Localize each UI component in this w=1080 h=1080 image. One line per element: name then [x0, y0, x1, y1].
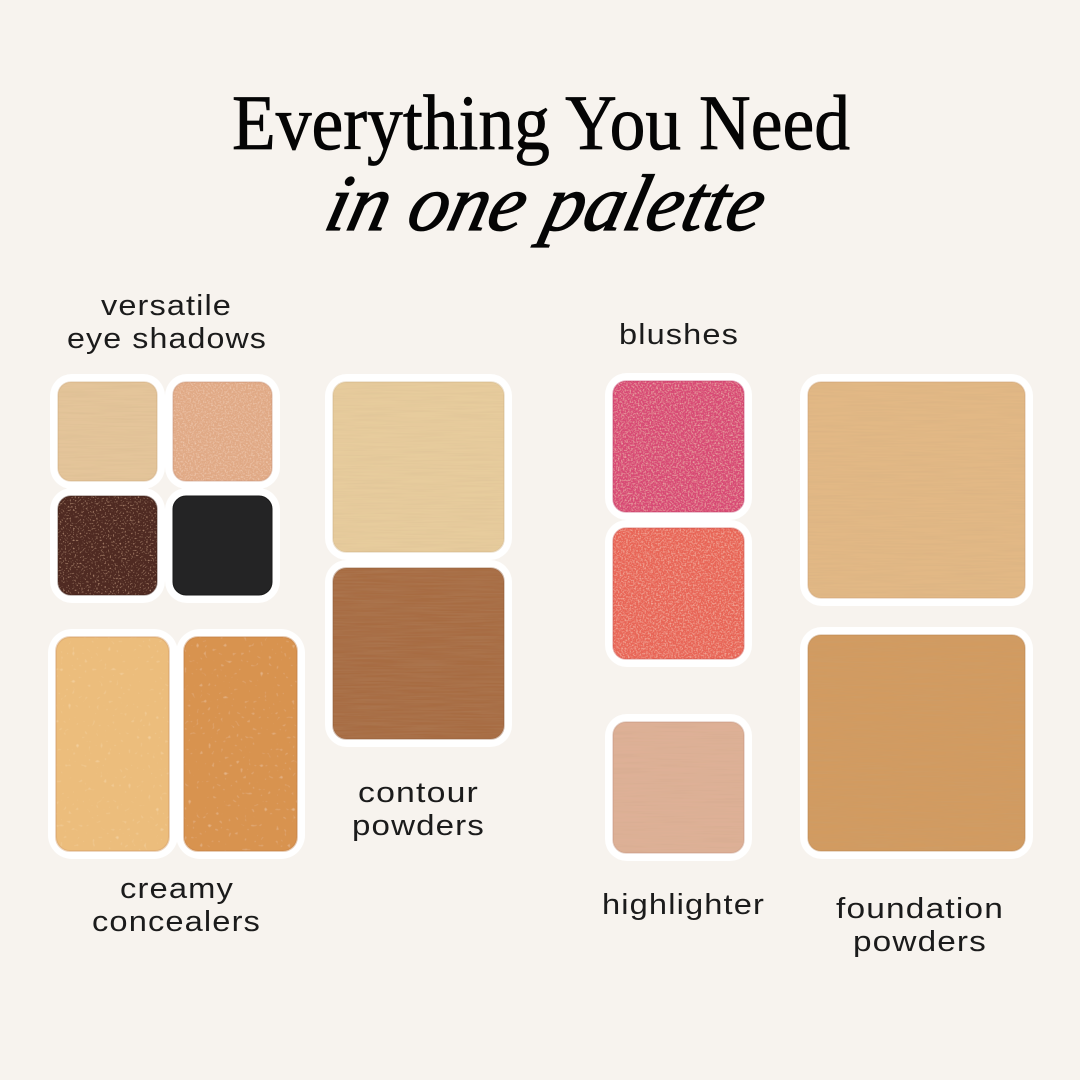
label: foundation powders	[836, 893, 1004, 958]
panel: versatile eye shadows	[50, 290, 280, 603]
panel: blushes	[605, 319, 752, 667]
panel: creamy concealers	[48, 629, 305, 938]
label: creamy concealers	[92, 873, 261, 938]
label: versatile eye shadows	[67, 290, 267, 355]
label: creamy concealers: creamy	[120, 873, 234, 905]
label: contour powders	[352, 777, 485, 842]
panel: highlighter	[602, 714, 765, 921]
label: highlighter: highlighter	[602, 889, 765, 921]
label: blushes: blushes	[619, 319, 739, 351]
contour swatches	[325, 374, 512, 747]
panel: contour powders	[325, 374, 512, 842]
eye shadow swatches	[50, 374, 280, 603]
blush swatches	[605, 373, 752, 667]
label: contour powders: powders	[352, 810, 485, 842]
panel: foundation powders	[800, 374, 1033, 958]
label: foundation powders: powders	[853, 926, 987, 958]
title	[232, 79, 850, 248]
infographic canvas	[48, 94, 1033, 957]
label: versatile eye shadows: versatile	[101, 290, 232, 322]
concealer swatches	[48, 629, 305, 859]
label: versatile eye shadows: eye shadows	[67, 323, 267, 355]
label: foundation powders: foundation	[836, 893, 1004, 925]
foundation swatches	[800, 374, 1033, 859]
highlighter swatch	[605, 714, 752, 861]
subheading: in one palette: in one palette	[318, 159, 776, 248]
heading: Everything You Need: Everything You Need	[232, 79, 850, 166]
label: contour powders: contour	[358, 777, 479, 809]
label: creamy concealers: concealers	[92, 906, 261, 938]
